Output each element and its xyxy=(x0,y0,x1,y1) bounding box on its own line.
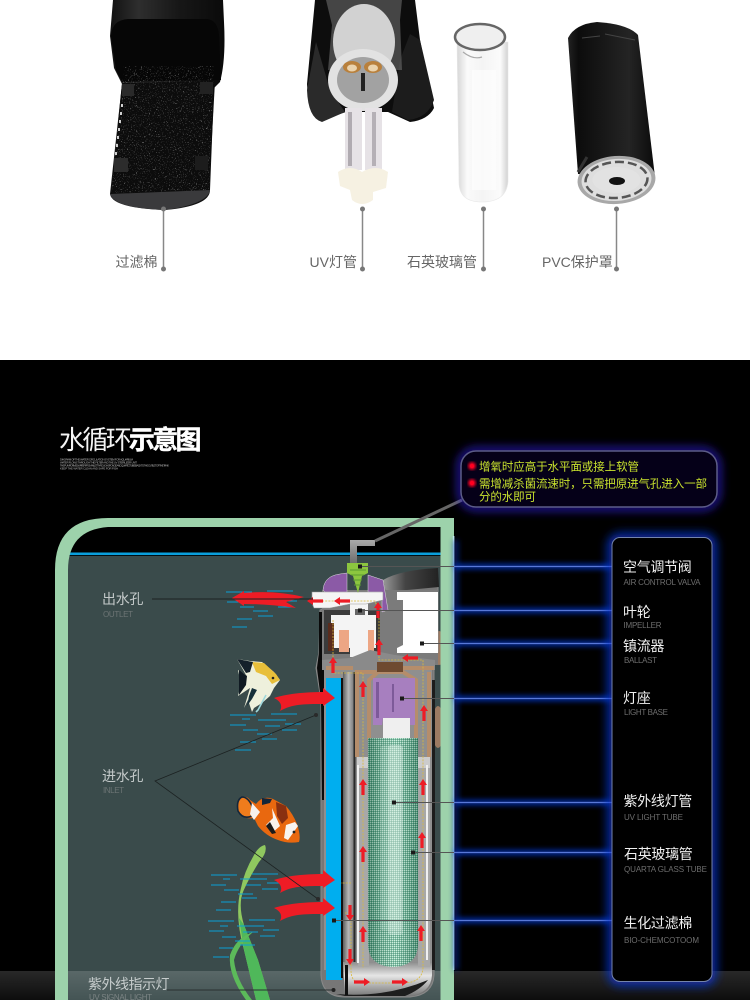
callout: usage tips: 分的水即可 xyxy=(479,490,536,504)
left callout lines xyxy=(152,599,336,992)
part: UV light tube: 紫外线灯管 xyxy=(624,793,692,809)
label: 进水孔 inlet: 进水孔 xyxy=(102,768,143,784)
icon: angelfish xyxy=(237,659,280,712)
part: quartz glass tube: QUARTA GLASS TUBE xyxy=(624,865,707,874)
round base xyxy=(343,962,432,996)
tip connector line xyxy=(375,500,462,541)
brown rear bumps xyxy=(432,631,446,748)
label: 紫外线指示灯 UV signal light: 紫外线指示灯 xyxy=(88,976,169,992)
connector lines to parts xyxy=(332,564,612,922)
label: 过滤棉: 过滤棉 xyxy=(116,254,158,270)
brown frame xyxy=(326,668,434,757)
blue glow on tank edge xyxy=(454,540,458,970)
part: light base: 灯座 xyxy=(623,690,651,706)
label: 紫外线指示灯 UV signal light xyxy=(88,976,169,1000)
part: impeller: IMPELLER xyxy=(624,621,662,630)
panel: aquarium water xyxy=(0,552,750,1000)
part: air control valve xyxy=(623,559,701,587)
callout: usage tips xyxy=(461,451,717,507)
arrows: large red water flow arrows xyxy=(232,591,335,921)
bottom ground band xyxy=(0,971,750,1000)
top housing lid xyxy=(383,568,439,592)
part: bio-chem cotton: 生化过滤棉 xyxy=(624,915,692,931)
part: UV light tube xyxy=(624,793,692,822)
lower body interior xyxy=(324,670,432,970)
label: 出水孔 outlet: OUTLET xyxy=(103,610,133,619)
part: impeller xyxy=(623,604,662,630)
panel: white product parts section xyxy=(0,0,750,360)
small red arrows xyxy=(307,597,428,986)
purple cap xyxy=(323,573,388,612)
photo: quartz glass tube xyxy=(455,24,508,202)
part: light base: LIGHT BASE xyxy=(624,708,668,717)
part: ballast xyxy=(623,638,664,665)
part: ballast: BALLAST xyxy=(624,656,657,665)
water ripple lines xyxy=(208,591,301,957)
part: impeller: 叶轮 xyxy=(623,604,651,620)
panel: aquarium green glass frame xyxy=(55,518,454,1000)
part: light base xyxy=(623,690,668,717)
part: quartz glass tube: 石英玻璃管 xyxy=(624,846,693,862)
label: PVC保护罩: PVC保护罩 xyxy=(542,254,613,270)
text block: fine print under heading: KEEP THE WATER CLEAN AND SAFE FOR FISH xyxy=(60,466,118,470)
photo: filter sponge housing xyxy=(108,0,224,210)
panel: part names list xyxy=(612,538,712,982)
photo: UV lamp xyxy=(307,0,434,204)
motor body xyxy=(324,600,380,657)
part: air control valve: 空气调节阀 xyxy=(623,559,692,575)
callout: usage tips: 增氧时应高于水平面或接上软管 xyxy=(479,460,639,474)
label: 进水孔 inlet: INLET xyxy=(103,786,124,795)
deck xyxy=(322,650,435,670)
label: 出水孔 outlet: 出水孔 xyxy=(102,591,143,607)
heading: 水循环示意图: 水循环示意图 xyxy=(59,425,201,455)
seaweed xyxy=(230,845,270,1000)
green biochemical filter xyxy=(368,738,418,967)
part: air control valve: AIR CONTROL VALVA xyxy=(624,578,701,587)
label: 石英玻璃管: 石英玻璃管 xyxy=(407,254,477,270)
ballast block xyxy=(397,592,438,653)
label: UV灯管: UV灯管 xyxy=(310,254,357,270)
upper grey compartment xyxy=(322,590,438,665)
part: bio-chem cotton xyxy=(624,915,699,945)
blue channel xyxy=(326,678,342,980)
arrow: outlet flow xyxy=(232,591,304,608)
text block: fine print under heading: WATER FLOWS THROUGH THE FILTER AND THE UV STERILIZER UNIT xyxy=(60,460,137,464)
inner walls xyxy=(357,757,430,967)
label: 进水孔 inlet xyxy=(102,768,143,795)
label: 过滤棉 xyxy=(116,206,166,272)
part: bio-chem cotton: BIO-CHEMCOTOOM xyxy=(624,936,699,945)
text block: fine print under heading xyxy=(60,458,169,470)
panel: black water circulation section xyxy=(0,360,750,1000)
air pipe and valve xyxy=(347,540,375,593)
icon: clownfish xyxy=(238,797,300,843)
part: quartz glass tube xyxy=(624,846,707,874)
part: UV light tube: UV LIGHT TUBE xyxy=(624,813,683,822)
water surface line xyxy=(66,552,447,555)
label: UV灯管 xyxy=(310,206,365,272)
light base xyxy=(373,678,415,725)
part: ballast: 镇流器 xyxy=(623,638,664,654)
impeller xyxy=(312,592,383,608)
diagram: filter device cutaway xyxy=(307,540,446,997)
callout: usage tips: 需增减杀菌流速时，只需把原进气孔进入一部 xyxy=(479,476,707,490)
photo: PVC protective cover xyxy=(568,22,657,207)
label: PVC保护罩 xyxy=(542,206,619,272)
text block: fine print under heading: THE PUMP DRIVES WATER FROM INLET THROUGH SPONGE AND QUARTZ TUBE BACK TO THE OUTLET OF THE TANK xyxy=(60,464,169,468)
text block: fine print under heading: DIAGRAM OF THE WATER CIRCULATION SYSTEM FOR AQUARIUM xyxy=(60,458,134,462)
label: 出水孔 outlet xyxy=(102,591,143,619)
outer shell xyxy=(316,585,438,997)
label: 石英玻璃管 xyxy=(407,206,486,272)
flow path dashes xyxy=(322,601,423,983)
